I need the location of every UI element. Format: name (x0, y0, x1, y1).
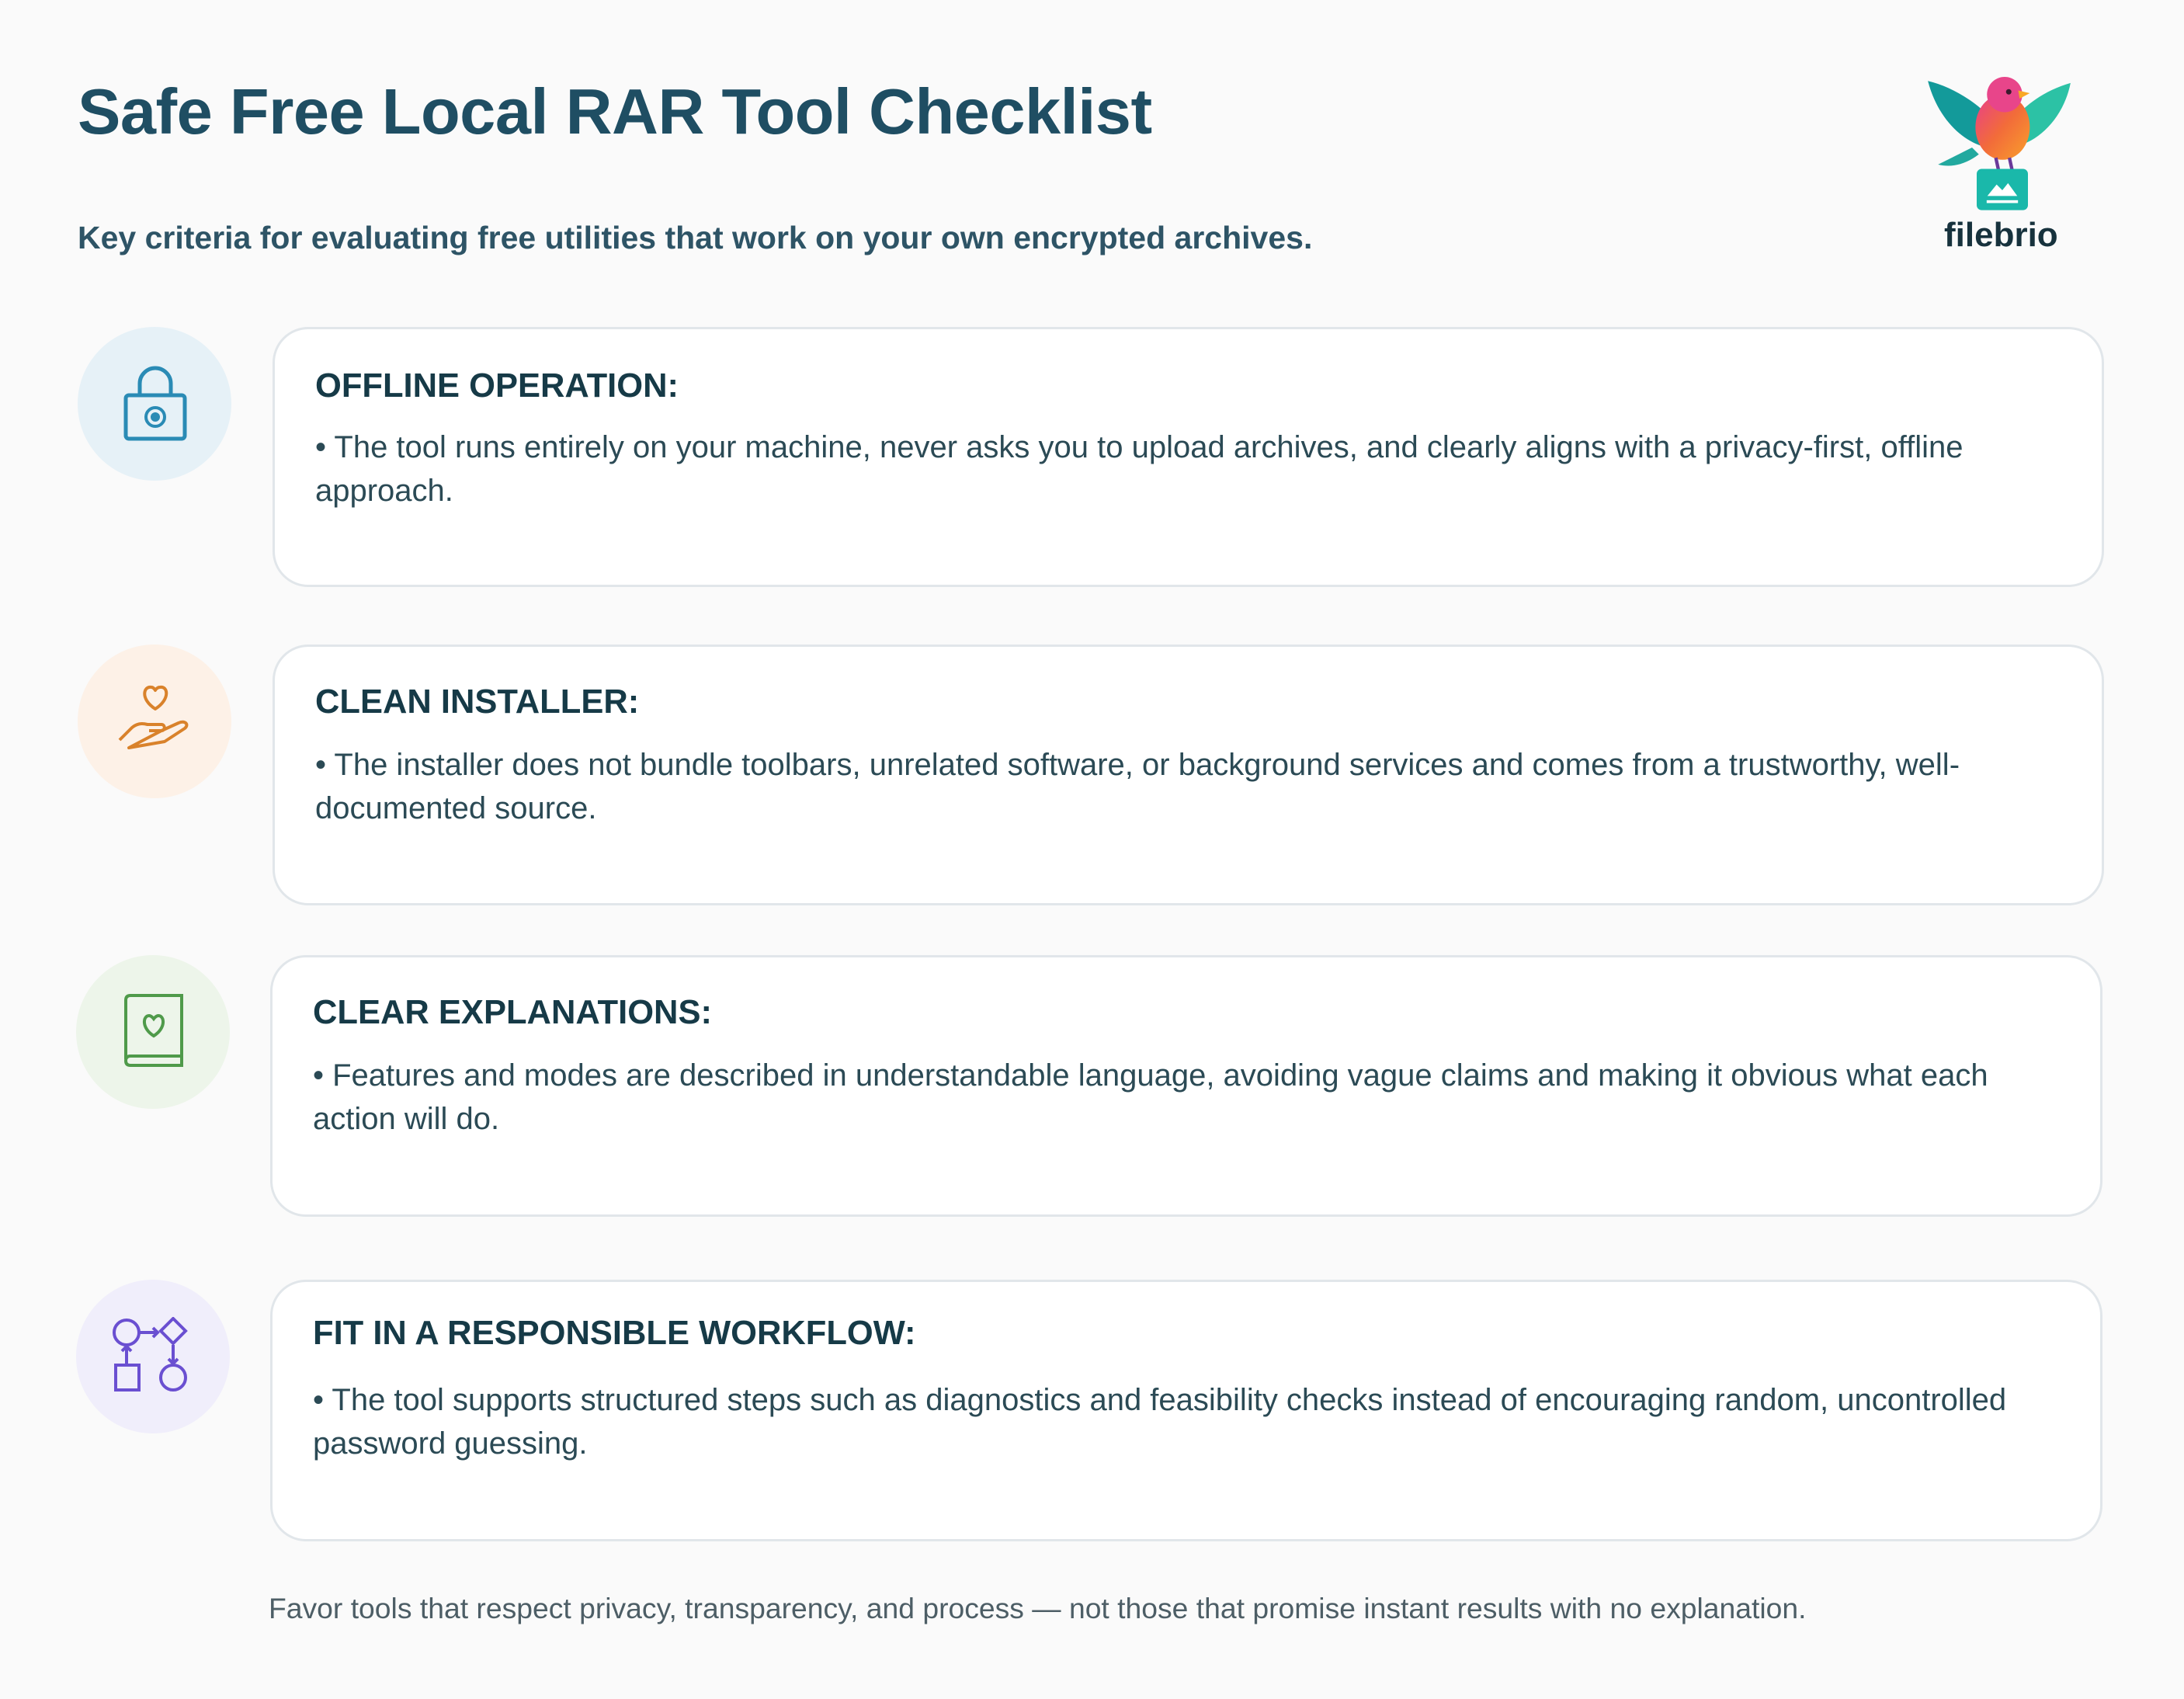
panel: responsible workflow: password guessing. (313, 1426, 588, 1461)
panel: offline operation: OFFLINE OPERATION: (315, 367, 679, 405)
icon circle: book heart (76, 955, 230, 1109)
icon circle: hand heart (78, 645, 231, 798)
title: Safe Free Local RAR Tool Checklist (78, 75, 1152, 148)
icon circle: workflow (76, 1280, 230, 1433)
panel: clear explanations (270, 955, 2102, 1217)
panel: clear explanations: CLEAR EXPLANATIONS: (313, 994, 712, 1031)
logo: filebrio: filebrio (1944, 216, 2058, 254)
panel: clear explanations: • Features and modes are described in understandable language, avoiding vague claims and making it obvious what each (313, 1058, 1988, 1093)
icon circle: lock (78, 327, 231, 481)
panel: responsible workflow: • The tool supports structured steps such as diagnostics and feasibility checks instead of encouraging random, uncontrolled (313, 1383, 2006, 1417)
panel: clear explanations: action will do. (313, 1102, 499, 1136)
panel: responsible workflow: FIT IN A RESPONSIBLE WORKFLOW: (313, 1315, 916, 1352)
panel: responsible workflow (270, 1280, 2102, 1541)
footer note: Favor tools that respect privacy, transparency, and process — not those that promise instant results with no explanation. (269, 1592, 1806, 1624)
panel: offline operation: • The tool runs entirely on your machine, never asks you to upload archives, and clearly aligns with a privacy-first, offline (315, 430, 1963, 464)
panel: clean installer: • The installer does not bundle toolbars, unrelated software, or background services and comes from a trustworthy, well- (315, 748, 1960, 782)
panel: clean installer: CLEAN INSTALLER: (315, 683, 639, 721)
panel: offline operation: approach. (315, 474, 453, 508)
panel: clean installer: documented source. (315, 791, 596, 825)
panel: clean installer (273, 645, 2104, 905)
panel: offline operation (273, 327, 2104, 587)
subtitle: Key criteria for evaluating free utilities that work on your own encrypted archives. (78, 220, 1312, 255)
logo: filebrio (1928, 77, 2071, 254)
